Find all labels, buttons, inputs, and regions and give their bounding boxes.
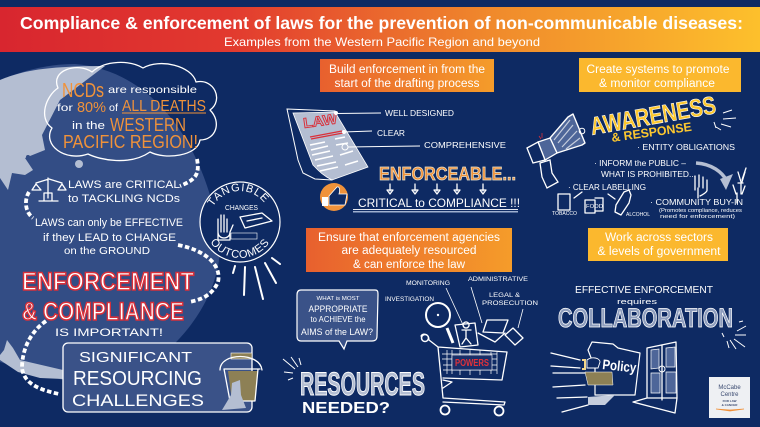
icon: thumbs up: [320, 183, 348, 211]
heading: enforceable: [379, 164, 516, 194]
text block: community buy-in: · COMMUNITY BUY-IN: [650, 197, 743, 207]
title: Compliance & enforcement of laws for the prevention of non-communicable diseases:: [20, 13, 743, 33]
heading: collaboration: [558, 303, 746, 349]
panel: significant resourcing challenges: SIGNIFICANT: [79, 349, 192, 366]
icon: law document: LAW: [302, 110, 339, 131]
cloud callout: NCD deaths: are responsible: [108, 84, 197, 96]
heading box: ensure enforcement agencies: & can enforce the law: [353, 259, 466, 271]
text block: effective enforcement: EFFECTIVE ENFORCEMENT: [575, 285, 713, 296]
cloud callout: NCD deaths: PACIFIC REGION!: [63, 132, 198, 152]
badge: tangible changes outcomes: TANGIBLE: [206, 184, 270, 204]
icon: shopping cart of powers: [421, 303, 523, 416]
heading: awareness and response: AWARENESS: [588, 91, 718, 141]
text block: community buy-in: need for enforcement): [660, 214, 735, 220]
text block: laws are critical: to TACKLING NCDs: [68, 193, 181, 205]
icon: leaking bucket: [220, 353, 262, 410]
logo: McCabe Centre: & CANCER: [722, 403, 738, 407]
text block: laws are critical: [68, 179, 181, 205]
heading box: build enforcement: Build enforcement in from the: [329, 64, 485, 76]
text block: awareness list: · INFORM the PUBLIC –: [594, 158, 686, 168]
text block: awareness list: · ENTITY OBLIGATIONS: [637, 142, 735, 152]
icons: tobacco, food, alcohol labels: [552, 190, 650, 218]
magnifying glass: [426, 303, 453, 343]
text block: community buy-in: [650, 197, 743, 220]
heading box: ensure enforcement agencies: [306, 228, 512, 272]
text block: laws can only be effective: if they LEAD to CHANGE: [43, 232, 176, 244]
speech bubble: what is most appropriate: WHAT is MOST: [316, 296, 360, 302]
heading box: build enforcement: start of the drafting process: [334, 78, 480, 90]
speech bubble: what is most appropriate: AIMS of the LAW?: [301, 327, 373, 338]
legal book: [505, 328, 523, 345]
heading: resources needed: [283, 357, 425, 417]
heading: enforcement and compliance: & COMPLIANCE: [22, 298, 184, 326]
cloud callout: NCD deaths: ALL DEATHS: [122, 98, 206, 115]
icon: hand and product: [218, 213, 272, 240]
heading box: work across sectors: & levels of government: [598, 246, 721, 258]
icons: tobacco, food, alcohol labels: ALCOHOL: [626, 212, 650, 218]
heading: enforcement and compliance: IS IMPORTANT!: [55, 327, 163, 339]
badge: tangible changes outcomes: OUTCOMES: [212, 239, 268, 258]
icon: door: [633, 342, 677, 413]
cloud callout: NCD deaths: WESTERN: [110, 115, 186, 135]
text block: laws are critical: LAWS are CRITICAL: [68, 179, 180, 191]
logo: McCabe Centre: FOR LAW: [723, 399, 737, 403]
rays under badge: [233, 258, 280, 299]
text block: effective enforcement: requires: [617, 297, 657, 306]
cloud callout: NCD deaths: in the: [72, 120, 105, 132]
text: critical to compliance: CRITICAL to COMPLIANCE !!!: [358, 196, 520, 210]
heading: enforcement and compliance: [22, 268, 194, 339]
heading box: create systems: & monitor compliance: [599, 78, 715, 90]
laptop: [478, 320, 508, 342]
icon: megaphone: [527, 114, 585, 188]
cart grid: [442, 350, 497, 375]
person on clipboard: [455, 322, 478, 347]
icon: scales of justice: [32, 178, 66, 201]
labels: powers: ADMINISTRATIVE: [468, 276, 529, 283]
panel: significant resourcing challenges: CHALLENGES: [72, 391, 204, 410]
labels: powers: INVESTIGATION: [385, 297, 434, 303]
speech bubble: what is most appropriate: [297, 290, 378, 349]
text block: awareness list: WHAT IS PROHIBITED...: [601, 169, 696, 179]
panel: significant resourcing challenges: [63, 343, 262, 412]
logo: McCabe Centre: Centre: [720, 392, 739, 398]
dashed connector paths: [22, 159, 219, 394]
labels: powers: LEGAL &: [489, 292, 521, 299]
icon: law document: [287, 109, 368, 180]
labels: powers: MONITORING: [406, 280, 450, 287]
icons: tobacco, food, alcohol labels: TOBACCO: [552, 211, 577, 217]
text block: laws can only be effective: on the GROUND: [64, 246, 150, 257]
cloud callout: NCD deaths: 80%: [77, 99, 106, 116]
powers label: POWERS: [455, 358, 489, 369]
heading: resources needed: RESOURCES: [300, 366, 425, 402]
cloud callout: NCD deaths: [26, 62, 217, 168]
heading box: build enforcement: [320, 59, 494, 92]
text block: awareness list: · CLEAR LABELLING: [568, 182, 646, 192]
labels: well designed, clear, comprehensive: COMPREHENSIVE: [424, 140, 506, 150]
panel: left backdrop with globe and landmass: [0, 64, 220, 380]
cloud callout: NCD deaths: NCDs: [62, 80, 104, 102]
logo: McCabe Centre: McCabe: [718, 385, 741, 391]
arrows: [387, 184, 486, 194]
heading box: work across sectors: [588, 228, 728, 261]
heading box: work across sectors: Work across sectors: [605, 232, 713, 244]
text block: effective enforcement: [575, 285, 713, 306]
icon: arrow and raised hands: [695, 163, 746, 203]
labels: well designed, clear, comprehensive: [334, 108, 506, 150]
cloud callout: NCD deaths: for: [57, 102, 74, 114]
icon: hands holding policy folder: Policy: [602, 356, 637, 376]
badge: tangible changes outcomes: CHANGES: [225, 203, 258, 212]
heading: enforceable: ENFORCEABLE...: [379, 164, 516, 184]
text block: community buy-in: (Promotes compliance, reduces: [659, 208, 743, 214]
heading box: create systems: Create systems to promote: [586, 64, 730, 76]
cart frame: [421, 334, 507, 405]
labels: powers: [385, 276, 538, 340]
text block: laws can only be effective: LAWS can only be EFFECTIVE: [35, 217, 183, 229]
subtitle: Examples from the Western Pacific Region and beyond: [224, 35, 540, 49]
icon: hands holding policy folder: [551, 342, 640, 412]
title banner: [0, 7, 760, 52]
badge: tangible changes outcomes: [199, 181, 281, 263]
text block: laws can only be effective: [35, 217, 183, 257]
cloud callout: NCD deaths: of: [109, 103, 118, 114]
heading box: create systems: [579, 58, 741, 92]
heading: awareness and response: & RESPONSE: [610, 120, 693, 145]
labels: well designed, clear, comprehensive: WELL DESIGNED: [385, 108, 454, 118]
text block: awareness list: [568, 142, 735, 192]
rays: [714, 110, 736, 130]
heading: enforcement and compliance: ENFORCEMENT: [22, 268, 194, 296]
heading: resources needed: NEEDED?: [302, 400, 390, 417]
speech bubble: what is most appropriate: to ACHIEVE the: [310, 314, 366, 324]
logo: McCabe Centre: [709, 377, 750, 418]
labels: well designed, clear, comprehensive: CLEAR: [377, 128, 405, 138]
icons: tobacco, food, alcohol labels: FOOD: [586, 204, 603, 210]
speech bubble: what is most appropriate: APPROPRIATE: [308, 304, 368, 315]
labels: powers: PROSECUTION: [482, 300, 538, 307]
heading box: ensure enforcement agencies: Ensure that enforcement agencies: [318, 232, 500, 244]
heading box: ensure enforcement agencies: are adequately resourced: [342, 245, 476, 257]
panel: significant resourcing challenges: RESOURCING: [73, 368, 202, 390]
